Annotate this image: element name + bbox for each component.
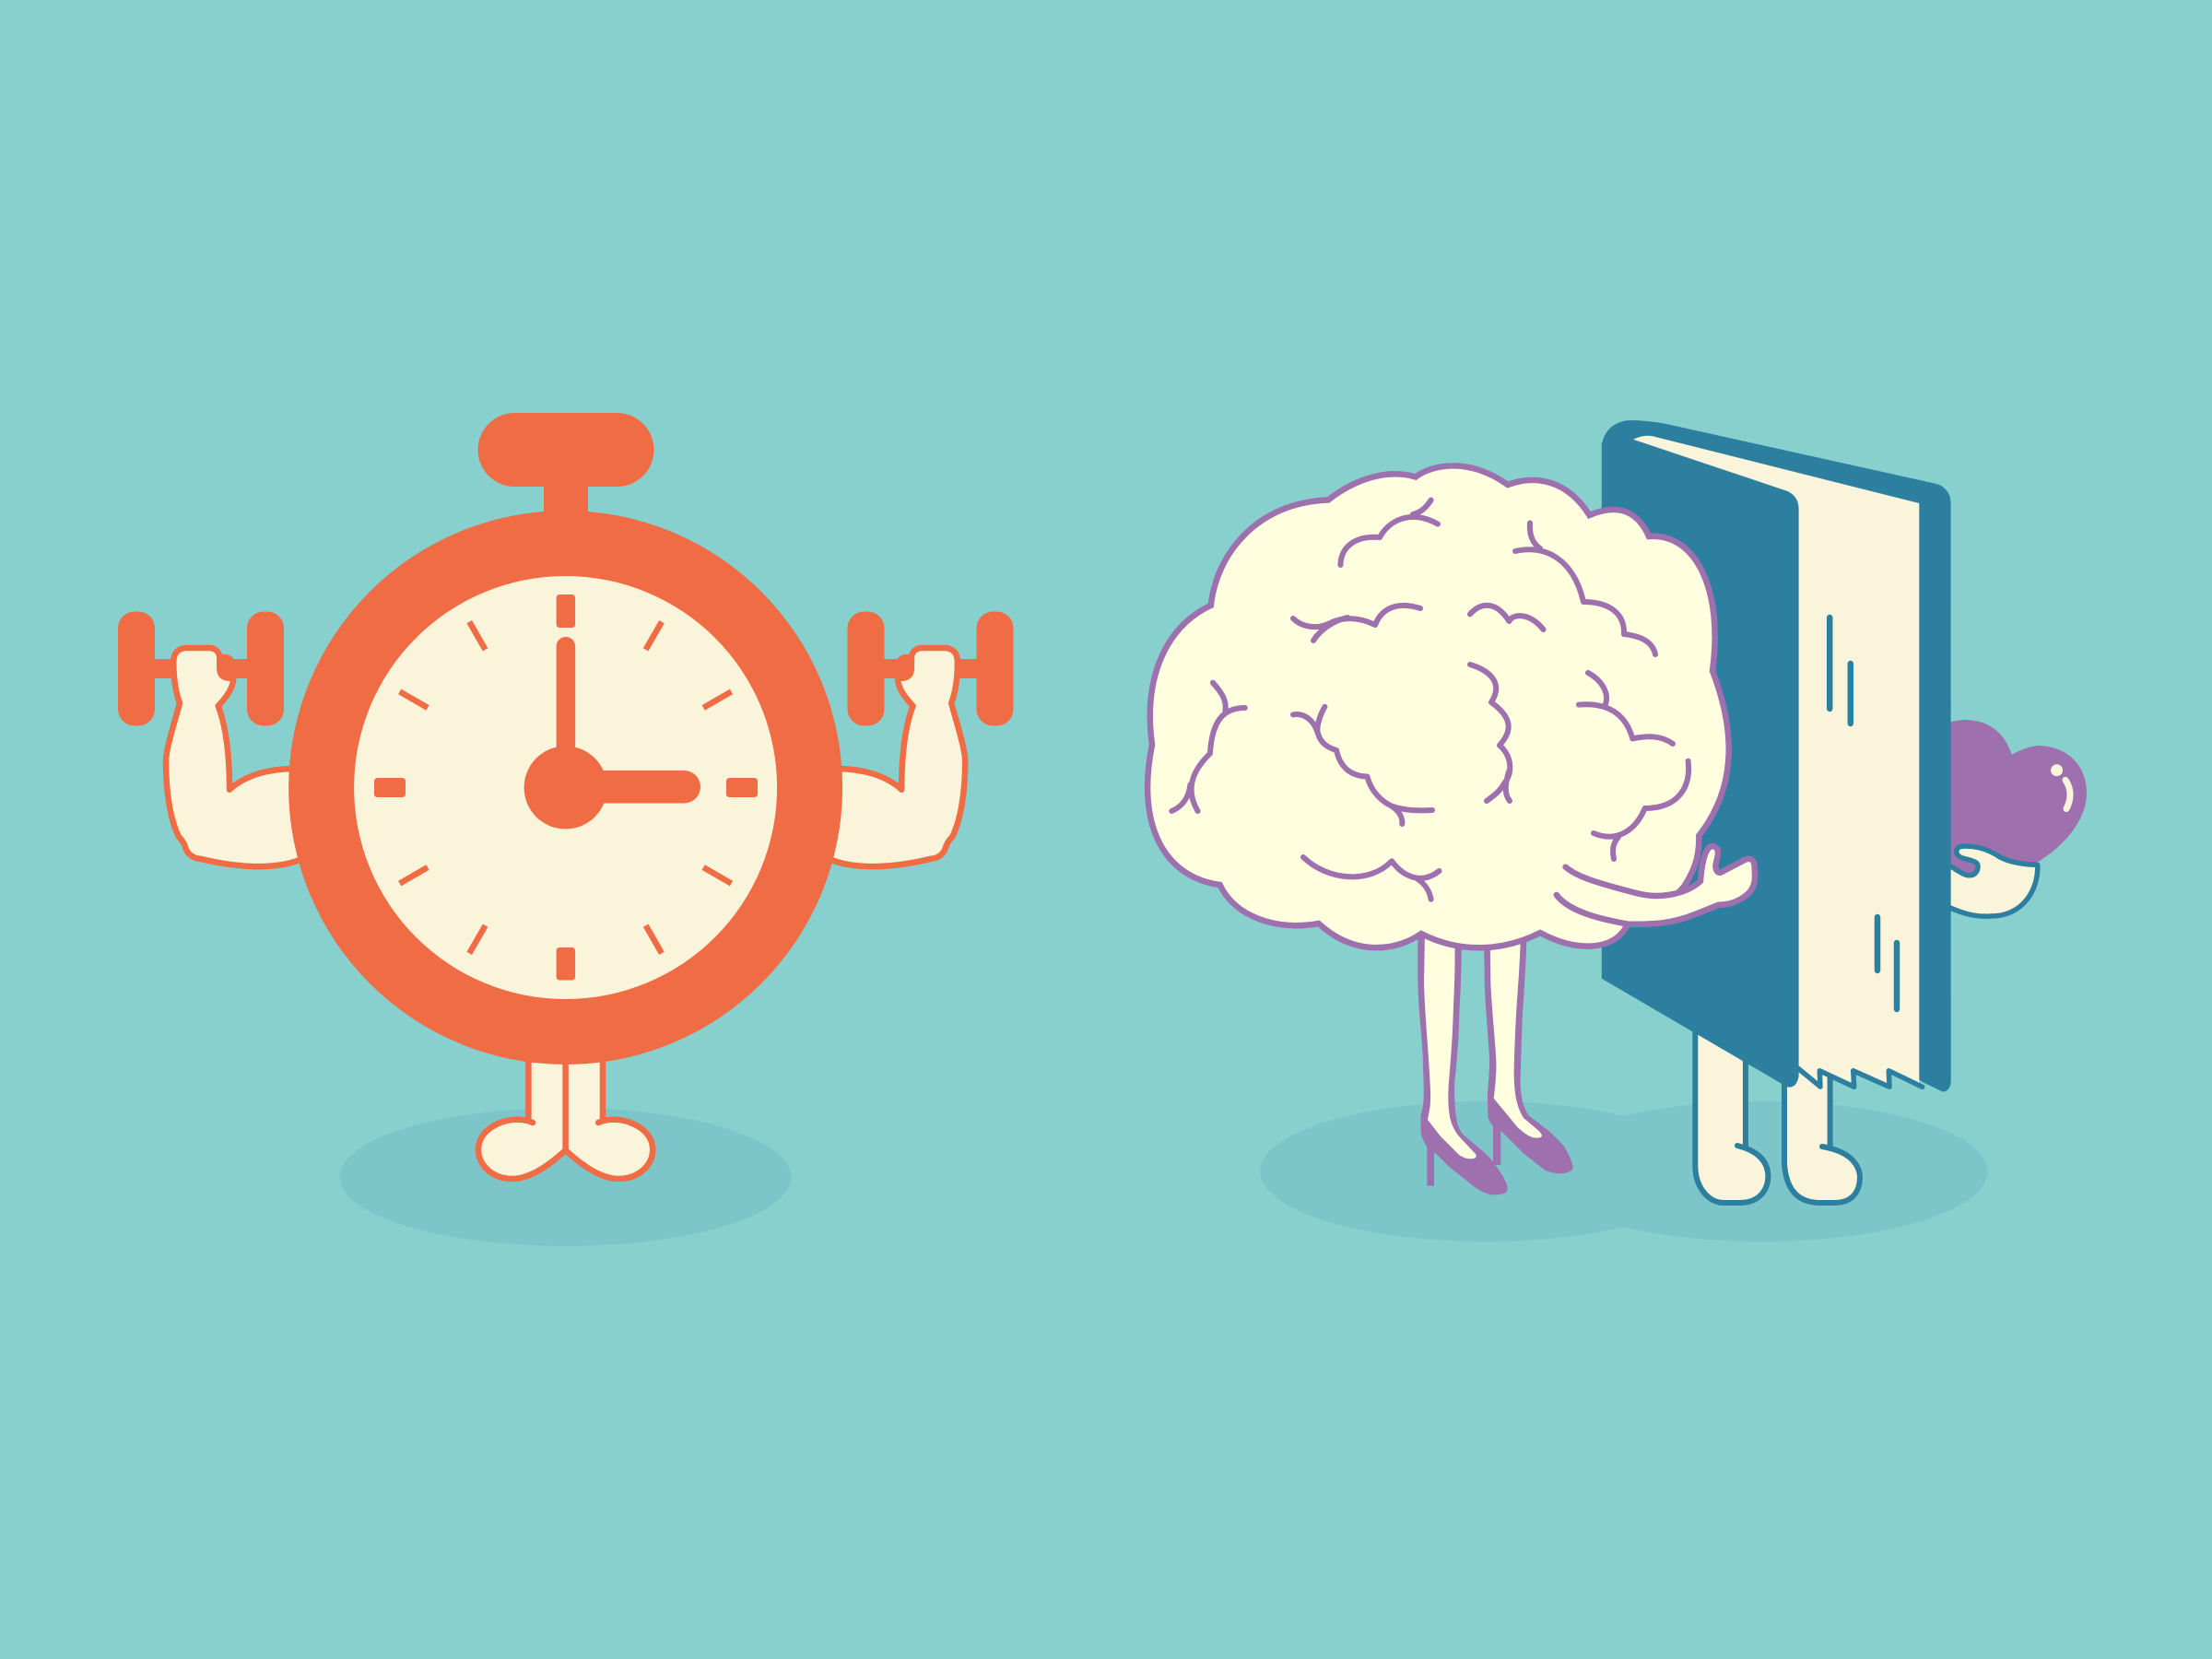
brain folds	[1171, 500, 1688, 900]
clock hands	[524, 637, 700, 830]
brain right leg and shoe	[1484, 931, 1573, 1173]
character: book with heart	[1602, 420, 2087, 1203]
legs and feet	[478, 1041, 653, 1179]
character: muscular stopwatch	[118, 413, 1014, 1179]
stopwatch dial	[354, 576, 777, 999]
stopwatch crown	[477, 413, 654, 525]
right flexed arm	[827, 648, 965, 866]
book front cover	[1602, 440, 1799, 1088]
ground shadows: brain and book	[1260, 1101, 1988, 1241]
book legs	[1695, 1014, 1860, 1203]
hour ticks	[374, 594, 758, 981]
hand holding heart	[1940, 846, 2038, 916]
character: brain with legs	[1147, 465, 1755, 1194]
icon: left dumbbell	[118, 612, 284, 726]
left flexed arm	[166, 648, 304, 866]
minor ticks	[400, 622, 732, 953]
brain left leg and shoe	[1418, 931, 1508, 1194]
torn page edge	[1798, 1068, 1923, 1087]
brain arm and hand	[1557, 846, 1755, 924]
page highlight lines	[1830, 618, 1897, 1009]
icon: purple heart	[1936, 720, 2087, 880]
book pages	[1633, 436, 1919, 1087]
icon: right dumbbell	[848, 612, 1014, 726]
ground shadow: stopwatch	[340, 1108, 792, 1246]
book back cover and spine	[1602, 420, 1951, 1092]
stopwatch case	[288, 511, 842, 1065]
brain body	[1147, 465, 1729, 947]
